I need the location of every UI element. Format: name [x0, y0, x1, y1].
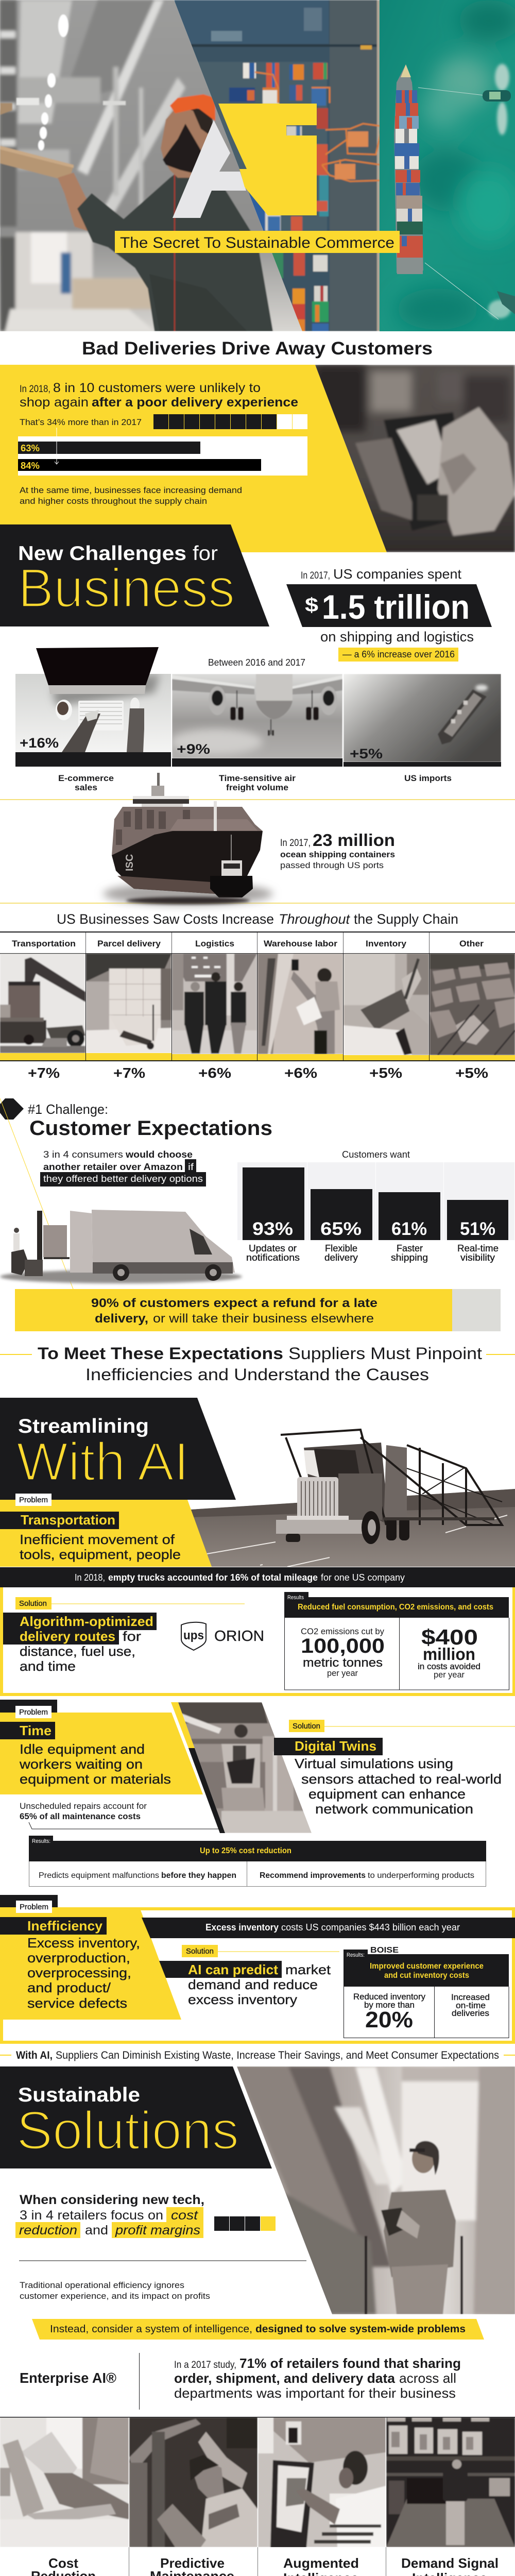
- panel: transportation problem: [0, 1494, 212, 1567]
- photo: inventory: [344, 954, 429, 1055]
- label: inefficiency: Inefficiency: [27, 1918, 103, 1934]
- stat: 23 million containers: ocean shipping containers: [280, 850, 395, 859]
- text: 3 in 4 consumers: would choose: [125, 1149, 193, 1160]
- panel: transportation solution frame: [0, 1587, 515, 1696]
- photo card: e-commerce sales: +16%: [20, 735, 59, 751]
- panel: new challenges heading: Business: [18, 557, 235, 619]
- stat: 1.5 trillion: [286, 566, 492, 662]
- text: between 2016 and 2017: Between 2016 and 2017: [208, 657, 305, 668]
- label: time: [0, 1722, 55, 1739]
- bar: empty trucks stat: empty trucks accounted for 16% of total mileage: [108, 1572, 318, 1583]
- text: excess inventory list: service defects: [27, 1995, 127, 2011]
- results table: transportation: million: [423, 1645, 475, 1664]
- text: when considering new tech: reduction: [19, 2223, 77, 2238]
- results table: boise: 20%: [365, 2007, 413, 2032]
- decorative yellow rule: [0, 799, 515, 800]
- text: idle equipment: [19, 1741, 171, 1787]
- results table: boise: [344, 1945, 509, 2038]
- results table: boise: and cut inventory costs: [384, 1971, 469, 1980]
- percentages: +5%: [455, 1065, 488, 1081]
- text: 8 in 10 customers: [20, 381, 298, 410]
- text: cost reduction details: [26, 2555, 101, 2576]
- text: excess inventory list: Excess inventory,: [27, 1935, 140, 1951]
- tag: problem: [15, 1494, 52, 1506]
- tag: solution: Solution: [19, 1599, 47, 1608]
- callout: 90% refund: or will take their business elsewhere: [153, 1312, 374, 1326]
- heading: costs throughout supply chain: Throughout: [279, 911, 350, 927]
- results table: transportation: in costs avoided: [418, 1662, 480, 1671]
- panel: sustainable solutions heading: [0, 2066, 272, 2168]
- tag: problem: Problem: [19, 1708, 48, 1717]
- callout: 90% refund: delivery,: [95, 1312, 148, 1326]
- results table: transportation: Results: [287, 1595, 304, 1601]
- bar chart: customers want: delivery: [324, 1252, 358, 1263]
- logo: UPS ORION: ORION: [214, 1628, 264, 1645]
- text: predictive maintenance details: Predictive: [160, 2555, 225, 2571]
- text: 71% of retailers: departments was important for their business: [174, 2385, 456, 2401]
- results table: transportation: Reduced fuel consumption, CO2 emissions, and costs: [298, 1603, 493, 1612]
- photo: road and car carrier truck: [191, 1430, 515, 1567]
- stat: 1.5 trillion: — a 6% increase over 2016: [342, 649, 455, 659]
- text: 71% of retailers: [174, 2355, 461, 2401]
- heading: meet these expectations: Suppliers Must Pinpoint: [288, 1344, 482, 1363]
- photo: container ship and tug: [103, 773, 273, 905]
- text: AI can predict: demand and reduce: [188, 1977, 318, 1992]
- results table: boise: by more than: [364, 2000, 415, 2010]
- text: when considering new tech: cost: [171, 2208, 198, 2223]
- photo: delivery van and forklift: [0, 1210, 242, 1283]
- stat: 23 million containers: In 2017,: [280, 838, 311, 849]
- bar chart: 63% vs 84%: 84%: [21, 461, 40, 471]
- percentages: +6%: [284, 1065, 317, 1081]
- column headers: Inventory: [366, 939, 407, 948]
- results table: predictive maintenance: Up to 25% cost reduction: [200, 1846, 291, 1855]
- text: 3 in 4 consumers: another retailer over Amazon: [43, 1162, 183, 1172]
- bar chart: customers want: Flexible: [325, 1243, 357, 1253]
- text: excess inventory list: overprocessing,: [27, 1965, 131, 1980]
- panel: sustainable solutions heading: Solutions: [16, 2100, 239, 2161]
- text: 3 in 4 consumers: if: [188, 1162, 194, 1172]
- bar chart: customers want: 93%: [252, 1219, 293, 1239]
- bar: empty trucks stat: In 2018,: [75, 1572, 105, 1583]
- tag: digital twins solution: Solution: [293, 1722, 320, 1731]
- heading: customer expectations: #1 Challenge:: [28, 1101, 108, 1117]
- panel: new challenges heading: [0, 524, 269, 626]
- text: when considering new tech: profit margins: [115, 2223, 200, 2238]
- results table: predictive maintenance: to underperforming products: [368, 1871, 474, 1880]
- results table: boise: Results:: [347, 1952, 365, 1958]
- results table: boise: on-time: [456, 2001, 486, 2010]
- tag: problem: [15, 1706, 52, 1718]
- text: excess inventory list: [27, 1935, 140, 2011]
- panel: inefficiency frame: [0, 1895, 515, 2044]
- results table: transportation: $400: [421, 1625, 478, 1649]
- results table: transportation: [284, 1592, 509, 1690]
- stat: 1.5 trillion: $: [305, 595, 318, 616]
- text: 8 in 10 customers: shop again: [20, 395, 89, 410]
- logo: white half of the A: [173, 120, 246, 218]
- text: inefficient movement: tools, equipment, people: [20, 1547, 181, 1562]
- column headers: Warehouse labor: [264, 939, 337, 948]
- banner: system of intelligence: designed to solve system-wide problems: [255, 2324, 466, 2335]
- bar chart: customers want: shipping: [391, 1252, 428, 1263]
- text: AI can predict: excess inventory: [188, 1992, 297, 2007]
- text: algorithm-optimized routes: Algorithm-optimized: [20, 1614, 153, 1629]
- hero photo: sea and container ship: [380, 0, 515, 331]
- text: 8 in 10 customers: In 2018,: [20, 384, 50, 395]
- text: algorithm-optimized routes: [3, 1613, 157, 1674]
- stat: 23 million containers: 23 million: [313, 831, 395, 850]
- text: 3 in 4 consumers: they offered better delivery options: [43, 1174, 203, 1184]
- divider: [139, 2353, 140, 2410]
- photo: transportation: [0, 954, 85, 1053]
- text: digital twins: network communication: [315, 1801, 473, 1817]
- yellow cost bars: [0, 1053, 515, 1061]
- stat: 1.5 trillion: In 2017,: [301, 570, 330, 581]
- photo: handheld scanner: [309, 365, 515, 552]
- label: transportation: Transportation: [21, 1512, 115, 1528]
- text: increasing demand: At the same time, businesses face increasing demand: [20, 485, 242, 495]
- text: excess inventory list: and product/: [27, 1980, 111, 1995]
- tag: solution: [15, 1597, 245, 1609]
- panel: new challenges heading: for: [193, 543, 218, 565]
- icon row: 8 of 10 squares: [153, 414, 307, 429]
- text: digital twins: Digital Twins: [295, 1738, 376, 1754]
- heading: meet these expectations: Inefficiencies and Understand the Causes: [85, 1365, 429, 1384]
- heading: customer expectations: Customer Expectations: [29, 1117, 272, 1140]
- stat: 23 million containers: [280, 831, 395, 870]
- results table: transportation: 100,000: [301, 1635, 385, 1657]
- panel: streamlining heading: With AI: [16, 1432, 189, 1492]
- text: AI can predict: [159, 1961, 331, 2007]
- photo: other: [430, 954, 515, 1055]
- heading: with AI suppliers can: Suppliers Can Diminish Existing Waste, Increase Their Savings, and Meet Consumer Expectations: [56, 2049, 499, 2061]
- label: inefficiency: [0, 1917, 107, 1935]
- text: AI can predict: market: [285, 1962, 331, 1977]
- bar chart: customers want: Faster: [397, 1243, 423, 1253]
- text: digital twins: Virtual simulations using: [295, 1756, 453, 1771]
- divider: [19, 2260, 306, 2261]
- panel: yellow delivery stat: [0, 365, 387, 552]
- text: algorithm-optimized routes: and time: [20, 1658, 76, 1674]
- heading: costs throughout supply chain: US Businesses Saw Costs Increase: [57, 911, 274, 927]
- bar: empty trucks stat: [0, 1567, 515, 1587]
- column headers: Other: [459, 939, 484, 948]
- heading: with AI suppliers can: With AI,: [16, 2049, 53, 2061]
- text: augmented intelligence details: Augmented: [283, 2555, 359, 2571]
- tag: solution: Solution: [186, 1947, 214, 1956]
- bar chart: customers want: 51%: [460, 1219, 495, 1239]
- column headers: Logistics: [195, 939, 234, 948]
- results table: predictive maintenance: Recommend improvements: [260, 1871, 366, 1880]
- text: AI can predict: AI can predict: [188, 1962, 278, 1977]
- bar chart: customers want: 65%: [320, 1219, 362, 1239]
- text: 8 in 10 customers: 8 in 10 customers were unlikely to: [53, 381, 261, 395]
- column: predictive maintenance: [129, 2417, 258, 2576]
- text: 71% of retailers: order, shipment, and delivery data: [174, 2370, 396, 2386]
- photo card: air freight: +9%: [177, 741, 210, 757]
- results table: predictive maintenance: before they happen: [161, 1871, 236, 1880]
- heading: costs throughout supply chain: the Supply Chain: [354, 911, 458, 927]
- bar: excess inventory cost: [142, 1918, 515, 1938]
- tag: digital twins solution: [289, 1720, 515, 1732]
- label: US imports: US imports: [404, 773, 452, 783]
- panel: time problem: [0, 1700, 203, 1794]
- results table: transportation: metric tonnes: [303, 1656, 383, 1670]
- bar: empty trucks stat: for one US company: [321, 1572, 405, 1583]
- tag: problem: Problem: [20, 1903, 48, 1911]
- text: traditional efficiency: [20, 2280, 210, 2301]
- photo card: air freight: [170, 674, 342, 767]
- text: 3 in 4 consumers: 3 in 4 consumers: [43, 1149, 123, 1160]
- text: 71% of retailers: In a 2017 study,: [174, 2360, 236, 2370]
- results table: predictive maintenance: [29, 1836, 486, 1887]
- photo: touch panel operator: [258, 2417, 386, 2548]
- text: inefficient movement: [20, 1532, 181, 1562]
- title banner: The Secret To Sustainable Commerce: [120, 234, 394, 251]
- results table: boise: BOISE: [370, 1946, 399, 1955]
- label: e-commerce sales: [58, 773, 114, 792]
- text: increasing demand: and higher costs throughout the supply chain: [20, 496, 207, 506]
- bar chart: customers want: notifications: [246, 1252, 300, 1263]
- text: digital twins: sensors attached to real-world: [301, 1771, 502, 1787]
- photo: parcel delivery: [86, 954, 171, 1053]
- icon: black badge with yellow line: [0, 1098, 73, 1289]
- text: 71% of retailers: across all: [399, 2370, 456, 2386]
- text: excess inventory list: overproduction,: [27, 1950, 130, 1965]
- text: when considering new tech: [15, 2193, 204, 2238]
- text: traditional efficiency: customer experience, and its impact on profits: [20, 2291, 210, 2301]
- stat: 1.5 trillion: on shipping and logistics: [320, 629, 474, 645]
- label: time: Time: [20, 1723, 52, 1738]
- bar chart: 63% vs 84%: 63%: [21, 443, 40, 453]
- heading: bad deliveries: Bad Deliveries Drive Away Customers: [82, 338, 433, 359]
- stat: 23 million containers: passed through US ports: [280, 860, 384, 870]
- bar: excess inventory cost: Excess inventory: [205, 1922, 279, 1933]
- text: unscheduled repairs: Unscheduled repairs account for: [20, 1801, 147, 1811]
- logo: yellow half of the A with i: [218, 104, 317, 215]
- text: unscheduled repairs: 65% of all maintenance costs: [20, 1811, 141, 1821]
- text: when considering new tech: and: [85, 2223, 108, 2238]
- bar: excess inventory cost: costs US companies $443 billion each year: [281, 1922, 460, 1933]
- bar chart: customers want: 61%: [391, 1219, 427, 1239]
- stat: 1.5 trillion: 1.5 trillion: [322, 588, 470, 626]
- table: supply chain cost increases: [0, 931, 515, 1081]
- photo: laptop: [0, 2417, 129, 2547]
- logo: UPS ORION: [181, 1622, 264, 1650]
- bar chart: customers want: Real-time: [457, 1243, 499, 1253]
- label: transportation: [0, 1512, 119, 1529]
- text: algorithm-optimized routes: distance, fuel use,: [20, 1643, 135, 1659]
- photo card: US imports: [344, 674, 501, 767]
- text: unscheduled repairs: [20, 1801, 147, 1821]
- percentages: +5%: [369, 1065, 402, 1081]
- bar chart: customers want: visibility: [460, 1252, 495, 1263]
- text: algorithm-optimized routes: delivery routes: [20, 1629, 115, 1644]
- label: e-commerce sales: sales: [75, 783, 97, 792]
- photo card: e-commerce sales: [15, 647, 171, 767]
- tag: solution: [182, 1945, 339, 1957]
- tag: problem: Problem: [19, 1496, 48, 1504]
- hero photo: warehouse and worker: [0, 0, 309, 331]
- text: inefficient movement: Inefficient movement of: [20, 1532, 175, 1547]
- results table: predictive maintenance: Results:: [32, 1838, 50, 1844]
- heading: meet these expectations: To Meet These Expectations: [38, 1344, 283, 1363]
- heading: costs throughout supply chain: [57, 911, 458, 927]
- photo: warehouse labor: [258, 954, 343, 1054]
- photo card: US imports: +5%: [350, 746, 383, 761]
- bar chart: 63% vs 84%: [18, 436, 307, 476]
- arrow: 63 to 84: [55, 428, 59, 464]
- stat: 1.5 trillion: US companies spent: [333, 566, 462, 582]
- connector line: [29, 1822, 219, 1829]
- results table: transportation: per year: [434, 1670, 465, 1680]
- callout: 90% refund: 90% of customers expect a refund for a late: [91, 1296, 377, 1310]
- hero photo: container port: [174, 0, 382, 331]
- column: demand signal intelligence: [386, 2417, 515, 2576]
- banner: system of intelligence: Instead, consider a system of intelligence,: [50, 2324, 252, 2335]
- results table: boise: Improved customer experience: [370, 1962, 484, 1971]
- text: augmented intelligence details: [273, 2555, 368, 2576]
- photo: digital twins worker: [171, 1702, 314, 1833]
- label: air freight volume: freight volume: [226, 783, 288, 792]
- bar chart: customers want: Updates or: [249, 1243, 297, 1253]
- tag: problem: [16, 1901, 52, 1913]
- text: idle equipment: workers waiting on: [19, 1756, 143, 1772]
- text: 34% more: That’s 34% more than in 2017: [20, 417, 142, 427]
- percentages: +7%: [28, 1065, 60, 1081]
- panel: new challenges heading: New Challenges: [18, 543, 186, 565]
- text: demand signal details: Demand Signal: [401, 2555, 499, 2571]
- heading: enterprise AI: Enterprise AI®: [20, 2370, 116, 2386]
- panel: sustainable solutions heading: Sustainable: [18, 2084, 140, 2106]
- logo: UPS ORION: ups: [183, 1629, 204, 1642]
- text: when considering new tech: 3 in 4 retailers focus on: [20, 2208, 163, 2223]
- banner: system of intelligence: [32, 2319, 484, 2340]
- text: 3 in 4 consumers: [40, 1149, 206, 1187]
- column headers: Transportation: [12, 939, 76, 948]
- text: idle equipment: Idle equipment and: [20, 1741, 145, 1757]
- column: cost reduction: [0, 2417, 129, 2576]
- callout: 90% refund: [15, 1289, 501, 1331]
- percentages: +6%: [198, 1065, 231, 1081]
- text: 8 in 10 customers: after a poor delivery experience: [92, 395, 298, 410]
- icon row: 3 of 4 squares: [214, 2216, 276, 2231]
- results table: transportation: CO2 emissions cut by: [301, 1626, 384, 1636]
- text: increasing demand: [20, 485, 242, 506]
- solution grid rules: [0, 2417, 515, 2576]
- photo: container ship and tug: ISC: [124, 854, 135, 871]
- text: digital twins: equipment can enhance: [308, 1786, 466, 1802]
- percentages: [28, 1065, 488, 1081]
- text: predictive maintenance details: [150, 2555, 234, 2576]
- photo: maintenance worker: [129, 2417, 258, 2547]
- panel: streamlining heading: [0, 1398, 236, 1500]
- text: digital twins: [274, 1738, 502, 1817]
- column headers: [12, 939, 484, 948]
- photo: warehouse racks: [386, 2417, 515, 2547]
- text: traditional efficiency: Traditional operational efficiency ignores: [20, 2280, 184, 2290]
- panel: streamlining heading: Streamlining: [18, 1415, 149, 1437]
- results table: transportation: per year: [327, 1668, 358, 1678]
- column headers: Parcel delivery: [97, 939, 161, 948]
- photo: logistics: [172, 954, 257, 1054]
- photo: warehouse aisle with worker: [232, 2066, 515, 2314]
- text: idle equipment: equipment or materials: [20, 1771, 171, 1787]
- bar chart: customers want: [237, 1162, 514, 1263]
- heading: customer expectations: [28, 1101, 272, 1140]
- percentages: +7%: [113, 1065, 145, 1081]
- results table: predictive maintenance: Predicts equipment malfunctions: [39, 1871, 159, 1880]
- results table: boise: Increased: [451, 1992, 490, 2002]
- text: when considering new tech: When considering new tech,: [20, 2193, 204, 2207]
- results table: boise: deliveries: [452, 2008, 489, 2018]
- text: algorithm-optimized routes: for: [123, 1629, 141, 1644]
- label: air freight volume: [219, 773, 296, 792]
- heading: meet these expectations: [0, 1344, 515, 1384]
- text: cost reduction details: Cost: [48, 2555, 78, 2571]
- label: e-commerce sales: E-commerce: [58, 773, 114, 783]
- text: 71% of retailers: 71% of retailers found that sharing: [239, 2355, 461, 2371]
- column: augmented intelligence: [258, 2417, 386, 2576]
- label: air freight volume: Time-sensitive air: [219, 773, 296, 783]
- results table: boise: Reduced inventory: [353, 1992, 425, 2002]
- text: customers want: Customers want: [342, 1149, 410, 1160]
